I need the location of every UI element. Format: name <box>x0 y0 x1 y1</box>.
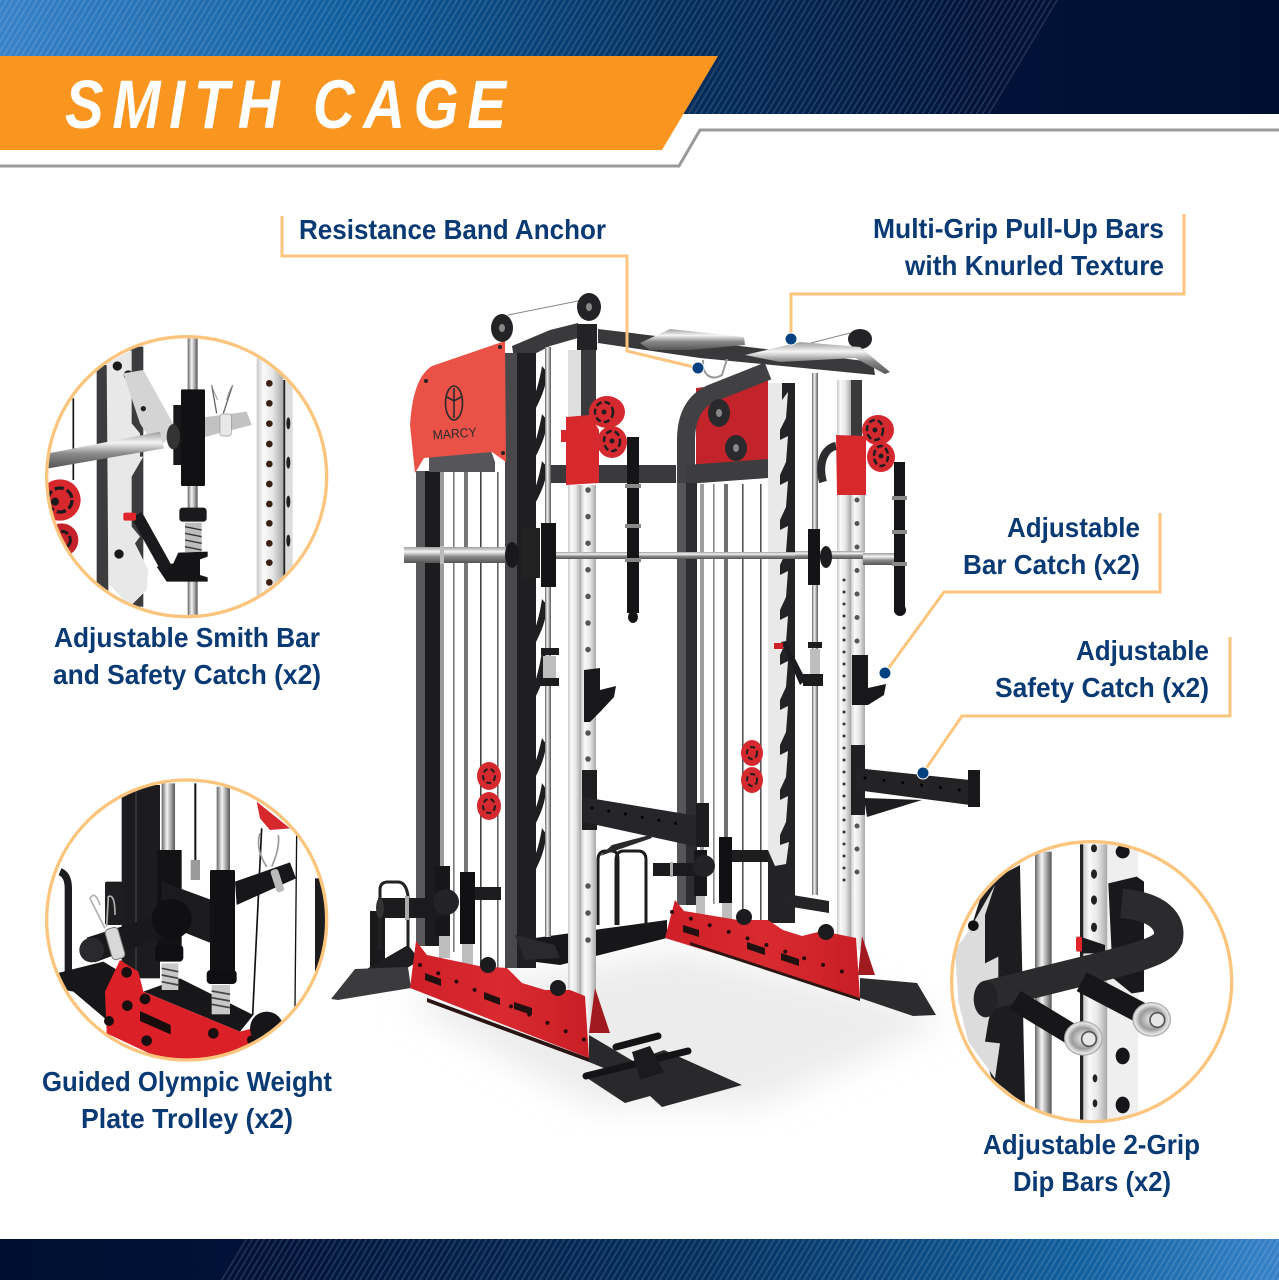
detail circle label: smith bar <box>53 622 321 690</box>
detail circle label: smith bar: Adjustable Smith Bar <box>54 622 320 653</box>
logo icon <box>446 386 462 420</box>
callout: adjustable bar catch <box>879 512 1160 679</box>
label: with Knurled Texture <box>904 250 1164 281</box>
callout: multi-grip pull-up bars <box>785 213 1184 345</box>
detail circle label: smith bar: and Safety Catch (x2) <box>53 659 321 690</box>
detail circle label: weight plate trolley: Guided Olympic Weight <box>42 1066 332 1097</box>
pull-up bars <box>640 329 890 374</box>
detail circle label: weight plate trolley <box>42 1066 332 1134</box>
floor shadow <box>400 950 950 1105</box>
left cable carriage <box>561 396 627 485</box>
label: Multi-Grip Pull-Up Bars <box>873 213 1164 244</box>
front left silver upright <box>568 350 597 1020</box>
detail circle label: dip bars: Dip Bars (x2) <box>1013 1166 1171 1197</box>
label <box>963 512 1140 580</box>
detail circle label: dip bars <box>983 1129 1200 1197</box>
right strap <box>892 462 907 616</box>
detail circle label: weight plate trolley: Plate Trolley (x2) <box>81 1103 293 1134</box>
label <box>995 635 1209 703</box>
right weight pulleys <box>741 740 763 793</box>
front foot plate <box>586 1035 742 1107</box>
rear left post and cables <box>416 471 499 972</box>
title: SMITH CAGE <box>65 65 508 143</box>
right spotter arm <box>856 768 980 817</box>
left strap <box>625 437 641 623</box>
right bar catch <box>774 641 886 705</box>
title banner <box>0 56 718 150</box>
label <box>873 213 1164 281</box>
left foot <box>331 967 411 1000</box>
label: Safety Catch (x2) <box>995 672 1209 703</box>
left red base plate <box>410 941 610 1062</box>
main product: smith cage machine <box>331 293 980 1107</box>
right red base plate <box>665 900 875 1001</box>
top pulleys <box>491 293 872 349</box>
left weight storage <box>365 882 420 990</box>
rear storage base <box>520 851 667 965</box>
callout: adjustable safety catch <box>917 635 1230 779</box>
front left post with teeth <box>505 347 560 968</box>
resistance band anchor <box>703 359 727 377</box>
label: Adjustable <box>1076 635 1209 666</box>
label: Bar Catch (x2) <box>963 549 1140 580</box>
right cable carriage <box>821 415 895 495</box>
callout: resistance band anchor <box>282 214 704 374</box>
detail circle label: dip bars: Adjustable 2-Grip <box>983 1129 1200 1160</box>
detail circle: adjustable 2-grip dip bars <box>952 842 1232 1122</box>
left top panel with logo <box>410 341 506 473</box>
logo wordmark: MARCY <box>432 424 477 443</box>
front spotter arm <box>583 797 709 856</box>
left weight trolley <box>376 866 501 967</box>
detail circle: smith bar and safety catch <box>39 337 327 617</box>
label: Adjustable <box>1007 512 1140 543</box>
left bar catch <box>539 648 616 722</box>
detail circle: guided olympic weight plate trolley <box>47 780 327 1068</box>
rear arch and red panel <box>551 371 768 924</box>
left weight pulleys <box>477 762 501 820</box>
front right silver upright <box>837 380 865 950</box>
right foot <box>860 978 936 1016</box>
header divider line <box>0 130 1279 166</box>
footer band <box>0 1239 1279 1280</box>
top frame beams <box>512 323 875 375</box>
right weight trolley <box>653 837 768 920</box>
smith bar <box>404 523 894 587</box>
header band <box>0 0 1279 114</box>
rear right weight tree <box>768 373 829 923</box>
label: Resistance Band Anchor <box>299 214 606 245</box>
